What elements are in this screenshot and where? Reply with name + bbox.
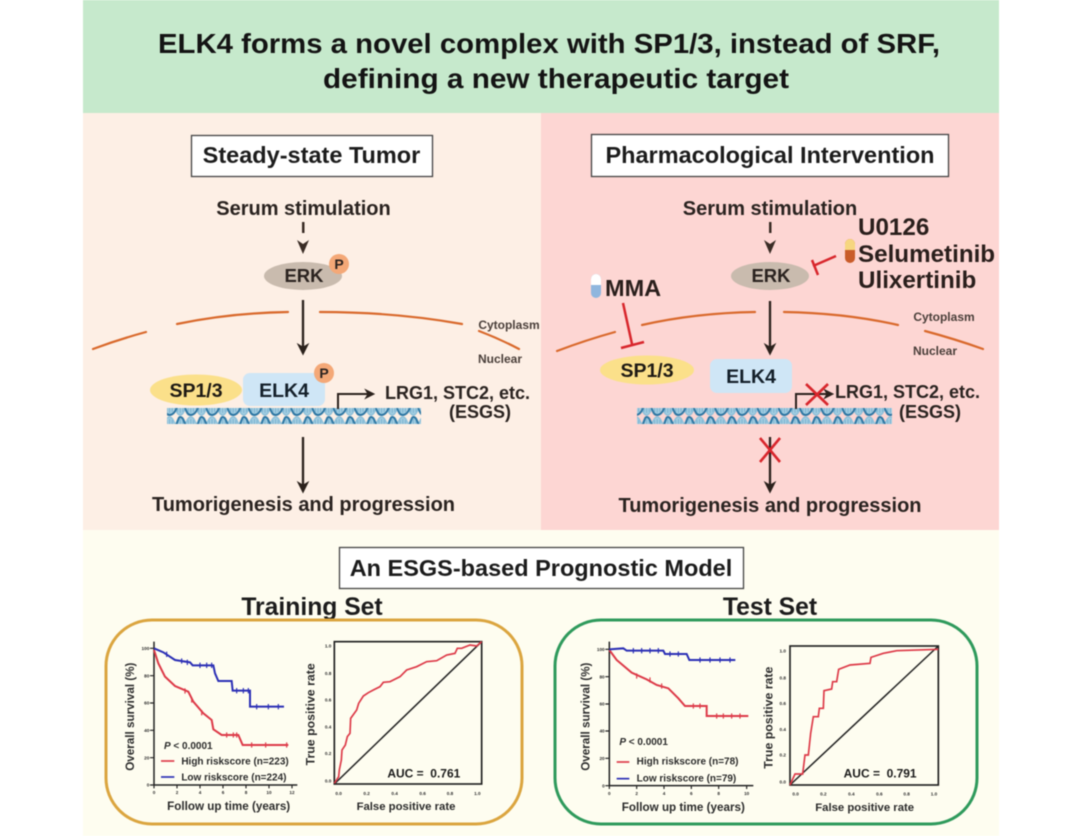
survival chart: test set: 40 [599, 729, 605, 734]
survival chart: training set: 100 [142, 646, 150, 651]
ROC chart: training set [303, 642, 482, 813]
panel: steady-state tumor [83, 113, 541, 530]
inhibition of ERK [812, 256, 836, 275]
ERK [731, 262, 809, 290]
panel: pharmacological intervention [541, 113, 999, 530]
survival chart: training set [124, 642, 297, 813]
heading box: pharmacological intervention [592, 134, 948, 176]
ROC chart: test set: 0.0 [780, 779, 786, 784]
dashed arrow to ERK [764, 222, 776, 254]
ROC chart: test set: 0.8 [780, 675, 786, 680]
nuclear label: Nuclear [478, 352, 522, 366]
ROC chart: training set: 1.0 [474, 791, 481, 796]
ROC chart: training set: 0.2 [325, 751, 332, 756]
survival chart: test set: Overall survival (%) [579, 662, 592, 771]
ROC chart: test set: 1.0 [780, 649, 786, 654]
arrow: to tumorigenesis [302, 437, 304, 491]
ROC chart: test set: 0.6 [876, 792, 883, 797]
panel: training set charts [106, 620, 522, 824]
serum stimulation label: Serum stimulation [216, 198, 391, 220]
ERK inhibitor names: Selumetinib [858, 241, 995, 268]
ROC chart: test set: 0.4 [780, 727, 786, 732]
survival chart: test set: 60 [599, 702, 605, 707]
arrow: ERK to nucleus [769, 301, 771, 353]
ROC chart: test set: AUC = 0.791 [844, 767, 917, 781]
ROC chart: test set: 1.0 [931, 792, 938, 797]
ROC chart: training set: 0.6 [419, 791, 426, 796]
ROC chart: training set: AUC = 0.761 [387, 767, 461, 781]
survival chart: test set: High riskscore (n=78) [637, 757, 738, 768]
heading box: pharmacological intervention: Pharmacological Intervention [605, 142, 935, 168]
dashed arrow to ERK [297, 222, 309, 254]
ELK4 protein [710, 359, 792, 393]
ROC chart: training set: 0.6 [325, 697, 332, 702]
survival chart: test set: 2 [635, 791, 638, 796]
survival chart: test set: 100 [597, 647, 605, 652]
promoter arrow [796, 394, 832, 409]
survival chart: training set: 4 [199, 790, 202, 795]
icon: orange capsule [845, 239, 855, 263]
nuclear label: Nuclear [913, 344, 957, 358]
cytoplasm label: Cytoplasm [913, 310, 975, 324]
blocked progression mark [760, 438, 780, 462]
ROC chart: training set: 0.4 [391, 791, 398, 796]
ROC chart: training set: 0.8 [447, 791, 454, 796]
SP1/3 protein: SP1/3 [620, 360, 674, 382]
ERK inhibitor names: Ulixertinib [858, 267, 976, 294]
ROC chart: training set: 0.0 [335, 791, 342, 796]
survival chart: training set: 80 [144, 673, 150, 678]
survival chart: test set: 0 [602, 783, 605, 788]
ROC chart: test set: 0.0 [792, 792, 799, 797]
heading box: prognostic model [340, 548, 744, 588]
survival chart: training set: Follow up time (years) [167, 800, 290, 813]
survival chart: test set: 10 [744, 791, 750, 796]
survival chart: training set: 20 [144, 755, 150, 760]
ROC chart: training set: 0.2 [363, 791, 370, 796]
target genes: LRG1, STC2, etc. [835, 382, 980, 402]
heading box: prognostic model: An ESGS-based Prognostic Model [350, 555, 732, 581]
survival chart: training set: 40 [144, 728, 150, 733]
ROC chart: test set: True positive rate [761, 666, 775, 769]
ELK4 protein with phospho tag: P [319, 365, 329, 381]
survival chart: training set: 12 [289, 790, 295, 795]
ROC chart: training set: 0.8 [325, 671, 332, 676]
ROC chart: test set: 0.2 [780, 753, 786, 758]
survival chart: training set: 2 [176, 790, 179, 795]
survival chart: test set: 8 [717, 791, 720, 796]
SP1/3 protein: SP1/3 [169, 380, 223, 402]
cytoplasm label: Cytoplasm [478, 318, 540, 332]
MMA label: MMA [605, 275, 661, 301]
header banner [83, 0, 999, 113]
ROC chart: training set: True positive rate [303, 663, 317, 765]
ROC chart: training set: False positive rate [357, 801, 455, 813]
target genes: LRG1, STC2, etc. [385, 383, 530, 403]
target genes: (ESGS) [899, 402, 961, 422]
inhibition of SP1/3 [621, 303, 644, 348]
blocked transcription mark [806, 384, 828, 405]
survival chart: training set: Low riskscore (n=224) [181, 772, 287, 783]
outcome label: Tumorigenesis and progression [152, 494, 455, 516]
survival chart: training set: 8 [245, 790, 248, 795]
outcome label: Tumorigenesis and progression [618, 495, 922, 517]
survival chart: test set: 80 [599, 674, 605, 679]
target genes: (ESGS) [449, 402, 511, 422]
ROC chart: test set: 0.6 [780, 701, 786, 706]
survival chart: training set: 10 [266, 790, 272, 795]
nuclear membrane [557, 312, 983, 351]
ERK with phospho tag [264, 254, 349, 290]
ROC chart: training set: 0.0 [325, 778, 332, 783]
SP1/3 protein [150, 374, 242, 406]
ERK with phospho tag: P [334, 256, 344, 272]
ROC chart: test set: 0.4 [848, 792, 855, 797]
survival chart: test set: P < 0.0001 [619, 737, 668, 748]
ROC chart: test set: 0.8 [903, 792, 910, 797]
ELK4 protein: ELK4 [726, 366, 776, 388]
promoter arrow [338, 394, 373, 409]
ERK with phospho tag: ERK [284, 265, 324, 286]
test set heading: Test Set [723, 594, 817, 621]
arrow: to tumorigenesis [769, 437, 771, 491]
ROC chart: training set: 1.0 [325, 643, 332, 648]
ROC chart: test set: 0.2 [820, 792, 827, 797]
panel: test set charts [555, 620, 977, 824]
ELK4 protein with phospho tag: ELK4 [259, 380, 309, 402]
survival chart: test set [579, 642, 753, 814]
DNA helix [167, 408, 421, 424]
survival chart: training set: P < 0.0001 [164, 741, 213, 752]
survival chart: test set: 6 [690, 791, 693, 796]
survival chart: test set: 20 [599, 756, 605, 761]
survival chart: training set: 0 [147, 783, 150, 788]
ROC chart: training set: 0.4 [325, 724, 332, 729]
survival chart: test set: Follow up time (years) [622, 801, 745, 814]
ERK: ERK [751, 265, 791, 286]
survival chart: test set: Low riskscore (n=79) [637, 774, 736, 785]
heading box: steady-state tumor [192, 136, 432, 176]
ELK4 protein with phospho tag [243, 363, 334, 406]
SP1/3 protein [600, 356, 694, 384]
heading box: steady-state tumor: Steady-state Tumor [203, 142, 420, 168]
title: defining a new therapeutic target [323, 63, 789, 94]
survival chart: training set: 6 [222, 790, 225, 795]
survival chart: training set: Overall survival (%) [124, 662, 137, 771]
icon: blue capsule [591, 274, 601, 298]
survival chart: test set: 4 [663, 791, 666, 796]
survival chart: training set: High riskscore (n=223) [181, 756, 289, 767]
arrow: ERK to nucleus [302, 300, 304, 353]
ROC chart: test set [761, 646, 938, 814]
nuclear membrane [93, 312, 519, 349]
survival chart: training set: 60 [144, 701, 150, 706]
training set heading: Training Set [241, 594, 383, 621]
panel: prognostic model [83, 530, 999, 836]
ROC chart: test set: False positive rate [815, 802, 914, 814]
survival chart: training set: 0 [153, 790, 156, 795]
serum stimulation label: Serum stimulation [683, 198, 857, 220]
ERK inhibitor names: U0126 [858, 214, 929, 241]
title: ELK4 forms a novel complex with SP1/3, instead of SRF, [158, 28, 940, 59]
DNA helix [637, 408, 892, 424]
survival chart: test set: 0 [608, 791, 611, 796]
